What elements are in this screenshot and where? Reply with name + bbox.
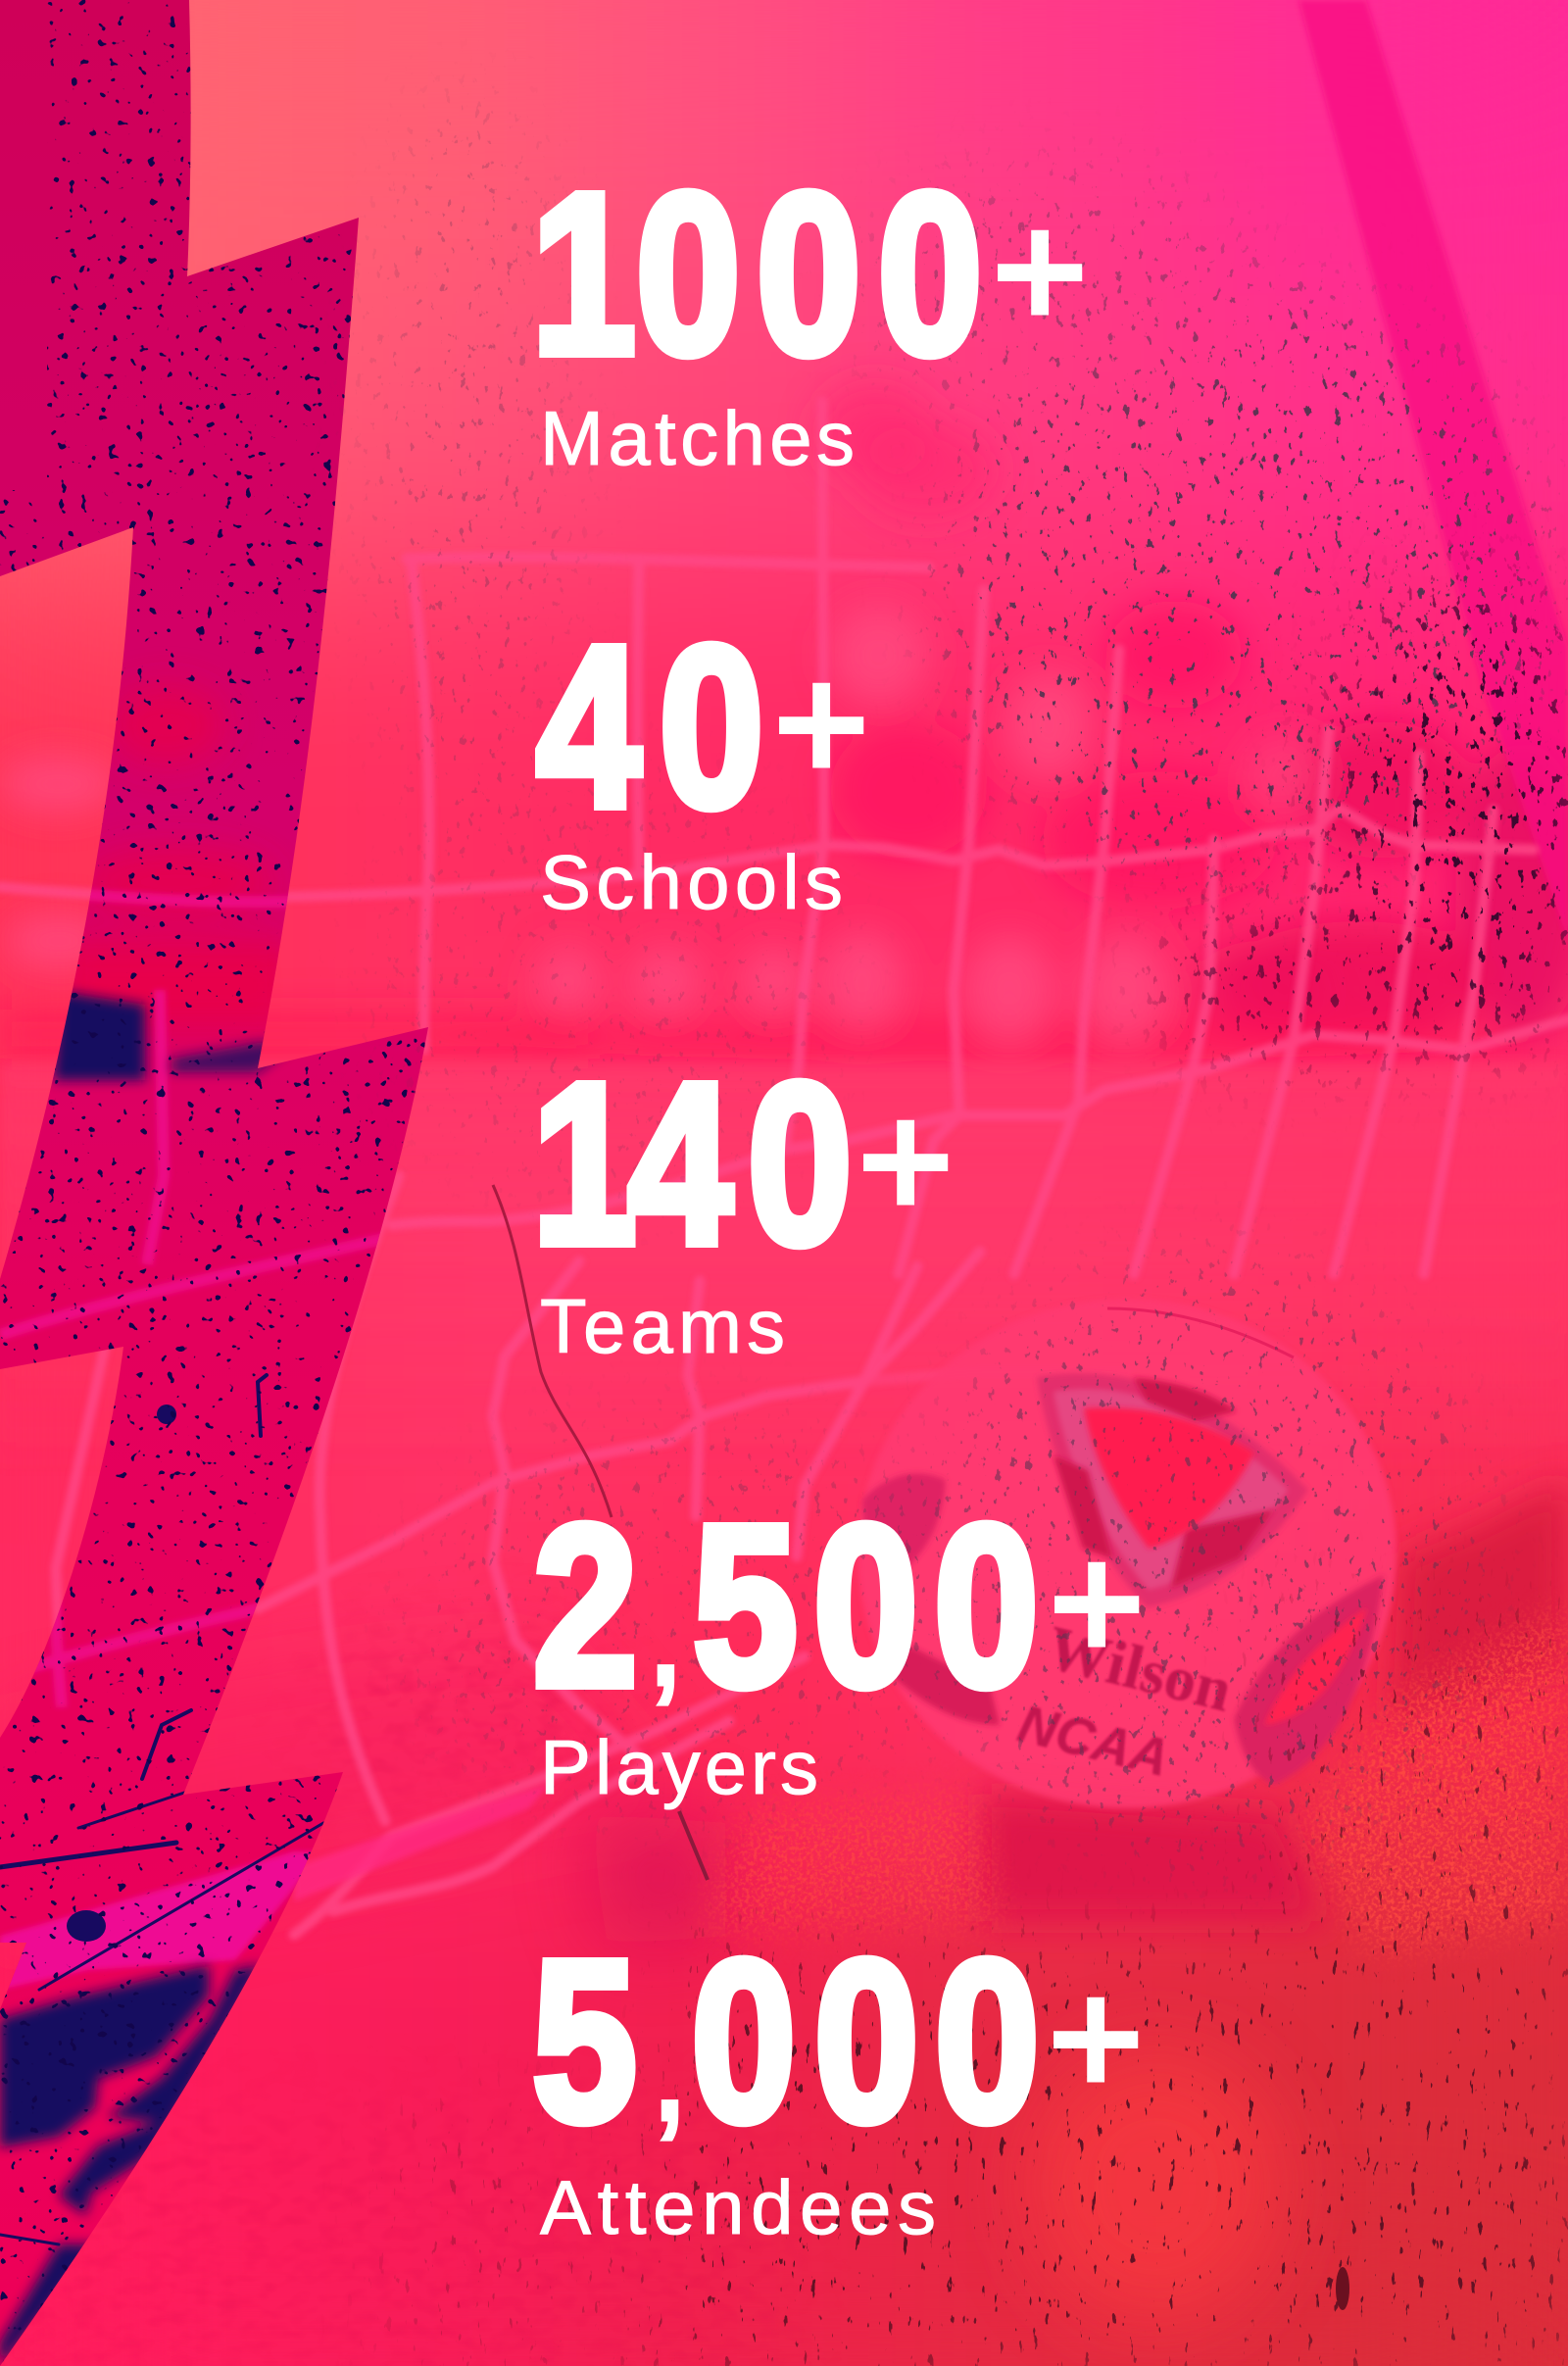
scratch lines: [493, 1185, 1349, 2310]
soccer ball: [858, 1299, 1396, 1808]
stat: 2,500+ Players: [533, 1478, 1144, 1810]
stat: 2,500+ Players: Players: [540, 1724, 818, 1810]
stat: 140+ Teams: 140: [532, 1036, 853, 1292]
stat: 5,000+ Attendees: Attendees: [540, 2164, 936, 2250]
stat: 140+ Teams: Teams: [540, 1283, 785, 1369]
stat: 40+ Schools: +: [774, 633, 868, 813]
stat: 1000+ Matches: 1000: [531, 146, 982, 402]
blurred stadium and trees behind the net: [0, 382, 1568, 1060]
stat: 2,500+ Players: +: [1050, 1512, 1144, 1693]
grass texture: [708, 1607, 1568, 1953]
stat: 2,500+ Players: ,: [651, 1570, 680, 1712]
stat: 1000+ Matches: Matches: [540, 395, 855, 481]
ball brand text: Wilson: [1041, 1612, 1239, 1725]
stat: 1000+ Matches: +: [993, 180, 1087, 361]
ball brand text: NCAA: [1012, 1694, 1175, 1788]
stat: 2,500+ Players: 500: [693, 1478, 1039, 1734]
stat: 40+ Schools: 40: [536, 599, 763, 855]
stat: 2,500+ Players: 2: [533, 1478, 638, 1734]
stat: 140+ Teams: [532, 1036, 953, 1369]
stat: 40+ Schools: Schools: [540, 839, 843, 925]
ink speckle texture: [344, 78, 1568, 2366]
stat: 140+ Teams: +: [858, 1070, 953, 1251]
stat: 1000+ Matches: [531, 146, 1087, 481]
goal post: [1298, 0, 1568, 941]
stat: 5,000+ Attendees: [532, 1913, 1143, 2250]
stat: 5,000+ Attendees: ,: [656, 2005, 684, 2147]
left dark brush shape: [0, 0, 428, 2366]
stat: 5,000+ Attendees: 000: [691, 1913, 1040, 2169]
stat: 40+ Schools: [536, 599, 868, 925]
ball brand text: [1012, 1612, 1239, 1788]
goal net: [0, 402, 1568, 1935]
stat: 5,000+ Attendees: +: [1049, 1947, 1143, 2128]
stat: 5,000+ Attendees: 5: [532, 1913, 637, 2169]
ground behind ball: [0, 1062, 1568, 2323]
